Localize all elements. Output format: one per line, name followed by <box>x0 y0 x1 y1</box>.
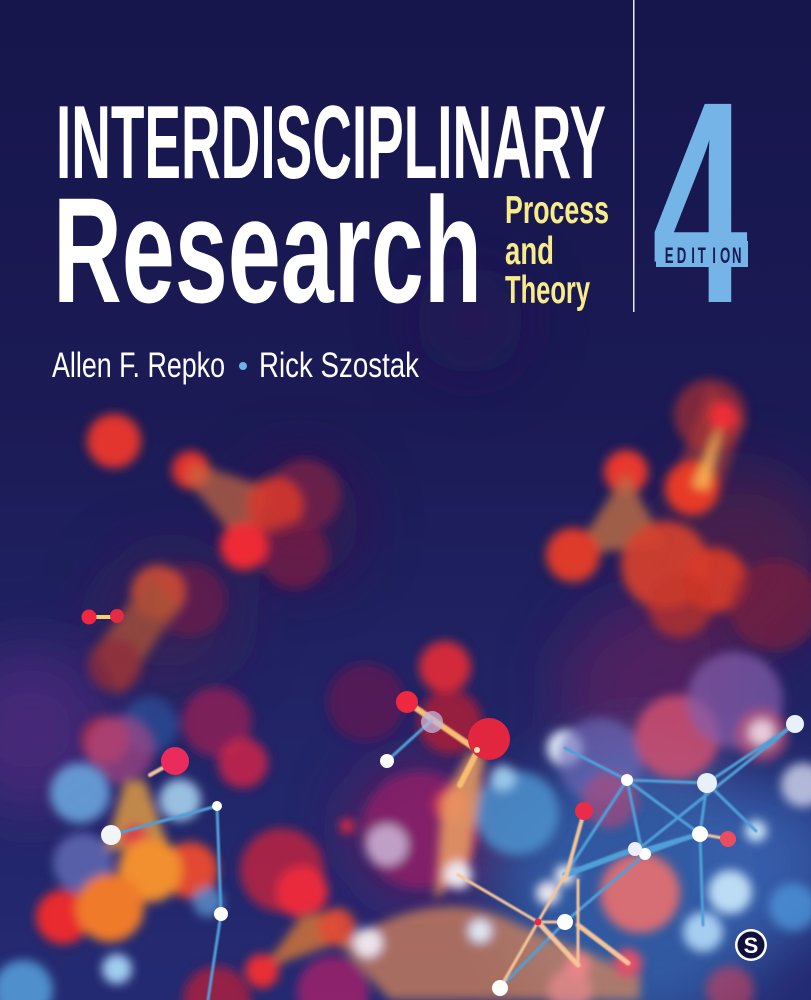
subtitle: Process <box>505 189 609 232</box>
subtitle: Theory <box>505 269 590 312</box>
small sharp node pair <box>82 609 124 624</box>
bokeh network: center <box>240 641 482 918</box>
bokeh network: upper right <box>546 379 811 650</box>
soft background haze <box>0 265 811 1000</box>
title: Research: Research <box>53 166 482 334</box>
authors: Rick Szostak <box>259 346 419 385</box>
edition number: 4 <box>652 42 749 364</box>
sharp network nodes <box>101 691 804 996</box>
subtitle <box>505 189 609 312</box>
edition label: EDITION <box>665 244 742 268</box>
sharp network lines <box>111 702 795 1000</box>
bokeh network: middle left <box>81 564 268 788</box>
bokeh network: upper left <box>87 414 341 589</box>
bokeh network: lower centre <box>245 730 640 1000</box>
subtitle: and <box>505 230 554 273</box>
publisher logo: S <box>744 933 758 958</box>
bokeh network: lower right <box>548 652 811 1000</box>
bokeh network: lower left <box>0 763 251 1000</box>
publisher logo <box>735 929 767 961</box>
divider <box>633 0 634 312</box>
authors <box>52 346 419 385</box>
authors: Allen F. Repko <box>52 346 225 385</box>
